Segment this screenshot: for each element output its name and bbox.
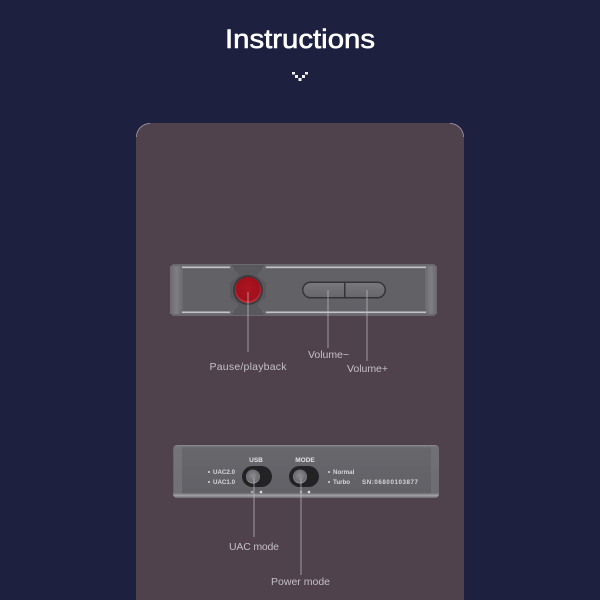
labels: UAC versions: UAC2.0	[213, 469, 236, 476]
icon: pixel chevron	[292, 72, 308, 81]
edge highlights	[182, 266, 426, 313]
button recess	[230, 265, 266, 315]
serial number: SN:06800103877	[362, 479, 419, 486]
callout: volume minus: Volume−	[308, 349, 349, 361]
labels: UAC versions	[208, 469, 236, 486]
switch position dots	[251, 491, 310, 493]
labels: power modes: Normal	[333, 469, 355, 476]
button: volume rocker	[302, 282, 386, 298]
callout: volume minus	[308, 290, 349, 361]
labels: power modes: Turbo	[333, 479, 350, 486]
device body	[170, 264, 437, 316]
labels: power modes	[328, 469, 355, 486]
callout: volume plus: Volume+	[347, 363, 388, 375]
callout: volume plus	[347, 290, 388, 375]
callout: pause/playback	[210, 292, 287, 373]
callout: power mode	[271, 478, 330, 588]
switch: USB	[242, 457, 272, 487]
switch: MODE: MODE	[295, 457, 315, 464]
switch: MODE	[289, 457, 319, 487]
device body	[173, 445, 439, 498]
switch: USB: USB	[249, 457, 263, 464]
callout: pause/playback: Pause/playback	[210, 361, 287, 373]
callout: power mode: Power mode	[271, 576, 330, 588]
button: pause/playback	[233, 275, 263, 305]
panel: device card	[136, 123, 464, 600]
callout: UAC mode	[229, 478, 279, 553]
callout: UAC mode: UAC mode	[229, 541, 279, 553]
device: bottom view	[173, 445, 439, 498]
title: Instructions	[225, 24, 375, 54]
device: top view	[170, 264, 437, 316]
labels: UAC versions: UAC1.0	[213, 479, 236, 486]
